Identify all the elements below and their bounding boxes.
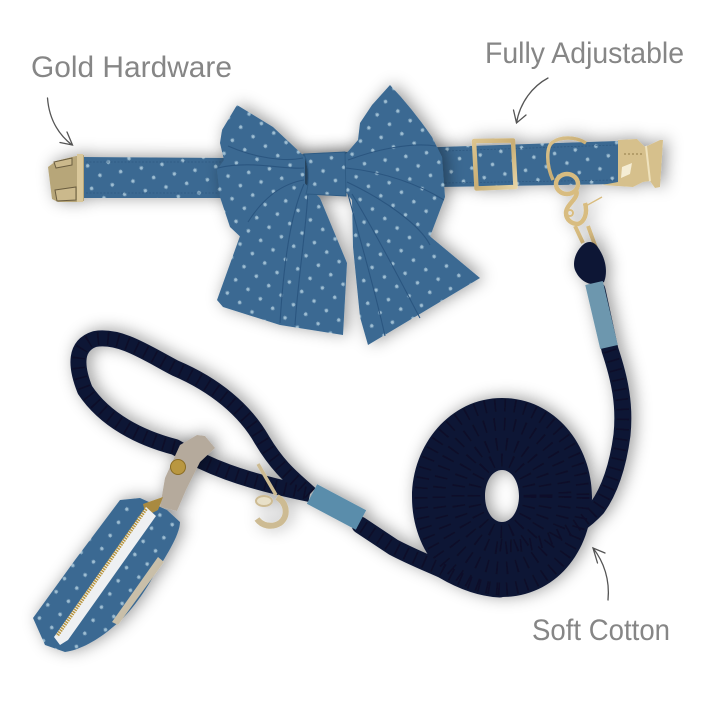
sailor bow <box>217 85 480 345</box>
rope: clasp to coil <box>500 290 623 546</box>
collar <box>48 138 663 248</box>
white zipper tape <box>54 507 156 645</box>
charm hook <box>256 464 286 526</box>
swivel clasp <box>556 174 602 248</box>
slide adjuster <box>474 140 516 188</box>
rope handle loop <box>78 338 310 494</box>
arrow: to adjuster slide <box>514 78 548 123</box>
poop bag holder <box>33 435 215 652</box>
rope twist texture <box>78 338 623 589</box>
d-ring <box>548 138 586 180</box>
blue thread wrap: lower <box>312 494 361 520</box>
label: Soft Cotton: Soft Cotton <box>532 614 670 647</box>
left tail <box>217 175 347 335</box>
right tail <box>346 192 480 345</box>
right wing <box>345 85 445 250</box>
top rope end <box>574 242 606 284</box>
brass rivet <box>170 460 186 474</box>
blue thread wrap: top <box>594 283 609 347</box>
zipper tab <box>143 497 163 516</box>
pouch body <box>33 498 180 652</box>
right buckle <box>602 139 663 188</box>
left buckle <box>48 154 84 202</box>
label: Fully Adjustable: Fully Adjustable <box>485 37 684 70</box>
pouch label <box>112 557 164 625</box>
rope coil <box>412 398 592 597</box>
arrow: to cotton rope <box>593 548 608 600</box>
bow knot <box>304 152 346 196</box>
gold zipper teeth <box>57 509 146 636</box>
leash <box>78 242 623 597</box>
arrow: to gold buckle <box>48 98 72 145</box>
rope: coil to handle <box>360 525 500 589</box>
label: Gold Hardware: Gold Hardware <box>31 51 232 84</box>
left wing <box>217 105 305 243</box>
bow folds <box>218 145 444 336</box>
leather strap <box>160 435 215 511</box>
collar strap <box>83 141 618 198</box>
